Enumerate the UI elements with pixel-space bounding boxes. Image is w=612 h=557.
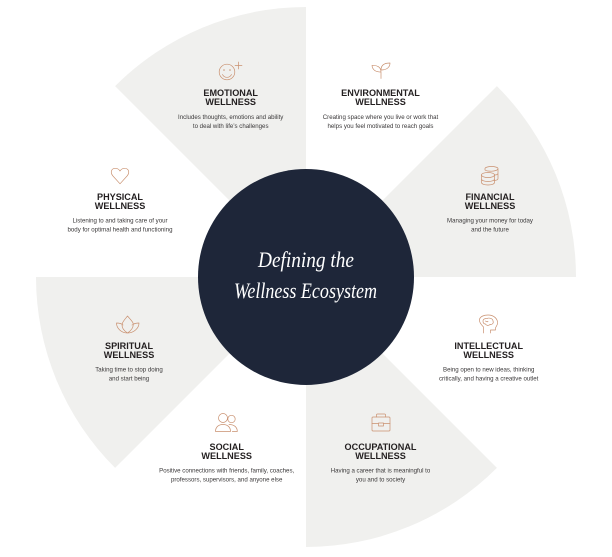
text: social description: professors, supervisors, and anyone else — [171, 477, 283, 484]
text: spiritual description: and start being — [109, 376, 149, 383]
panel: emotional wellness — [178, 62, 284, 130]
icon: briefcase — [372, 414, 390, 431]
heading: occupational: WELLNESS — [355, 451, 406, 461]
heading: environmental: ENVIRONMENTAL — [341, 88, 420, 98]
heading: physical: WELLNESS — [95, 201, 145, 211]
icon: two people — [216, 414, 237, 432]
icon: sprout — [372, 63, 390, 78]
panel: financial wellness — [447, 166, 534, 234]
wedge: financial — [306, 86, 576, 277]
text: physical description: Listening to and taking care of your — [72, 218, 168, 225]
text: emotional description: to deal with life’s challenges — [193, 123, 269, 130]
text: spiritual description: Taking time to stop doing — [95, 367, 163, 374]
text: emotional description: Includes thoughts, emotions and ability — [178, 114, 284, 121]
heading: emotional: WELLNESS — [205, 97, 256, 107]
text: occupational description: you and to society — [356, 477, 406, 484]
panel: spiritual wellness — [95, 316, 163, 383]
icon: lotus — [116, 316, 139, 333]
central circle — [198, 169, 414, 385]
central title: Wellness Ecosystem — [234, 278, 377, 303]
heading: financial: FINANCIAL — [466, 192, 515, 202]
heading: spiritual: SPIRITUAL — [105, 341, 153, 351]
central title: Defining the — [257, 247, 354, 272]
heading: social: WELLNESS — [201, 451, 252, 461]
panel: physical wellness — [68, 168, 172, 234]
text: financial description: and the future — [471, 227, 509, 234]
text: occupational description: Having a career that is meaningful to — [331, 468, 431, 475]
icon: head with brain — [479, 315, 498, 333]
heading: environmental: WELLNESS — [355, 97, 406, 107]
heading: financial: WELLNESS — [465, 201, 515, 211]
icon: smiley with plus — [219, 62, 242, 80]
heading: social: SOCIAL — [210, 442, 244, 452]
heading: spiritual: WELLNESS — [104, 350, 154, 360]
text: social description: Positive connections with friends, family, coaches, — [159, 468, 295, 475]
heading: emotional: EMOTIONAL — [203, 88, 258, 98]
icon: coin stacks — [482, 166, 498, 185]
panel: environmental wellness — [323, 63, 439, 130]
heading: occupational: OCCUPATIONAL — [345, 442, 417, 452]
wedge: spiritual — [36, 277, 306, 468]
text: physical description: body for optimal health and functioning — [68, 227, 172, 234]
central title — [234, 247, 377, 303]
text: environmental description: Creating space where you live or work that — [323, 114, 439, 121]
text: intellectual description: Being open to new ideas, thinking — [443, 367, 534, 374]
heading: physical: PHYSICAL — [97, 192, 143, 202]
icon: heart — [111, 168, 129, 184]
panel: intellectual wellness — [439, 315, 539, 383]
heading: intellectual: WELLNESS — [463, 350, 514, 360]
text: financial description: Managing your money for today — [447, 218, 534, 225]
panel: social wellness — [159, 414, 295, 484]
heading: intellectual: INTELLECTUAL — [454, 341, 523, 351]
text: environmental description: helps you feel motivated to reach goals — [328, 123, 433, 130]
panel: occupational wellness — [331, 414, 431, 484]
text: intellectual description: critically, and having a creative outlet — [439, 376, 539, 383]
wedge: occupational — [306, 277, 497, 547]
wedge: emotional — [115, 7, 306, 277]
